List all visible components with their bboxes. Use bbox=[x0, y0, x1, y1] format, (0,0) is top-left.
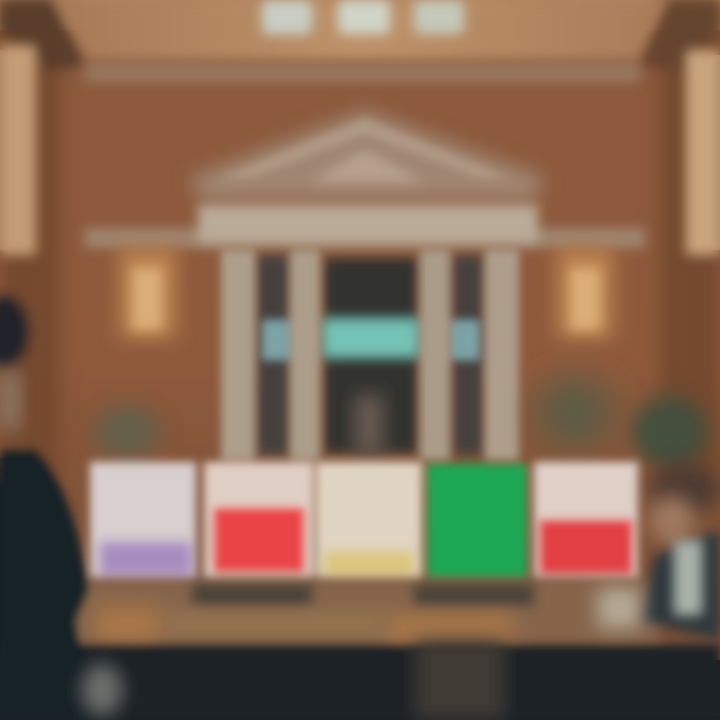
entablature bbox=[85, 228, 645, 248]
panel: green bbox=[427, 464, 527, 578]
plants bbox=[94, 376, 708, 468]
dark openings bbox=[256, 255, 290, 455]
colored panels bbox=[90, 462, 638, 578]
panel: lavender bbox=[90, 462, 196, 578]
panel: red right bbox=[534, 462, 638, 578]
building facade bbox=[85, 110, 645, 460]
teal screen bbox=[262, 320, 292, 360]
panel: red bbox=[204, 462, 314, 578]
person on the left bbox=[0, 296, 122, 720]
person on the right bbox=[598, 464, 720, 640]
side pilasters bbox=[0, 45, 720, 255]
columns bbox=[221, 250, 255, 460]
pediment bbox=[190, 110, 545, 200]
ceiling with skylights bbox=[0, 0, 720, 82]
table bbox=[0, 580, 720, 720]
figure in doorway bbox=[355, 395, 383, 455]
side wall shading bbox=[0, 0, 720, 480]
panel: cream yellow bbox=[316, 462, 422, 578]
wall lamps bbox=[120, 248, 613, 338]
